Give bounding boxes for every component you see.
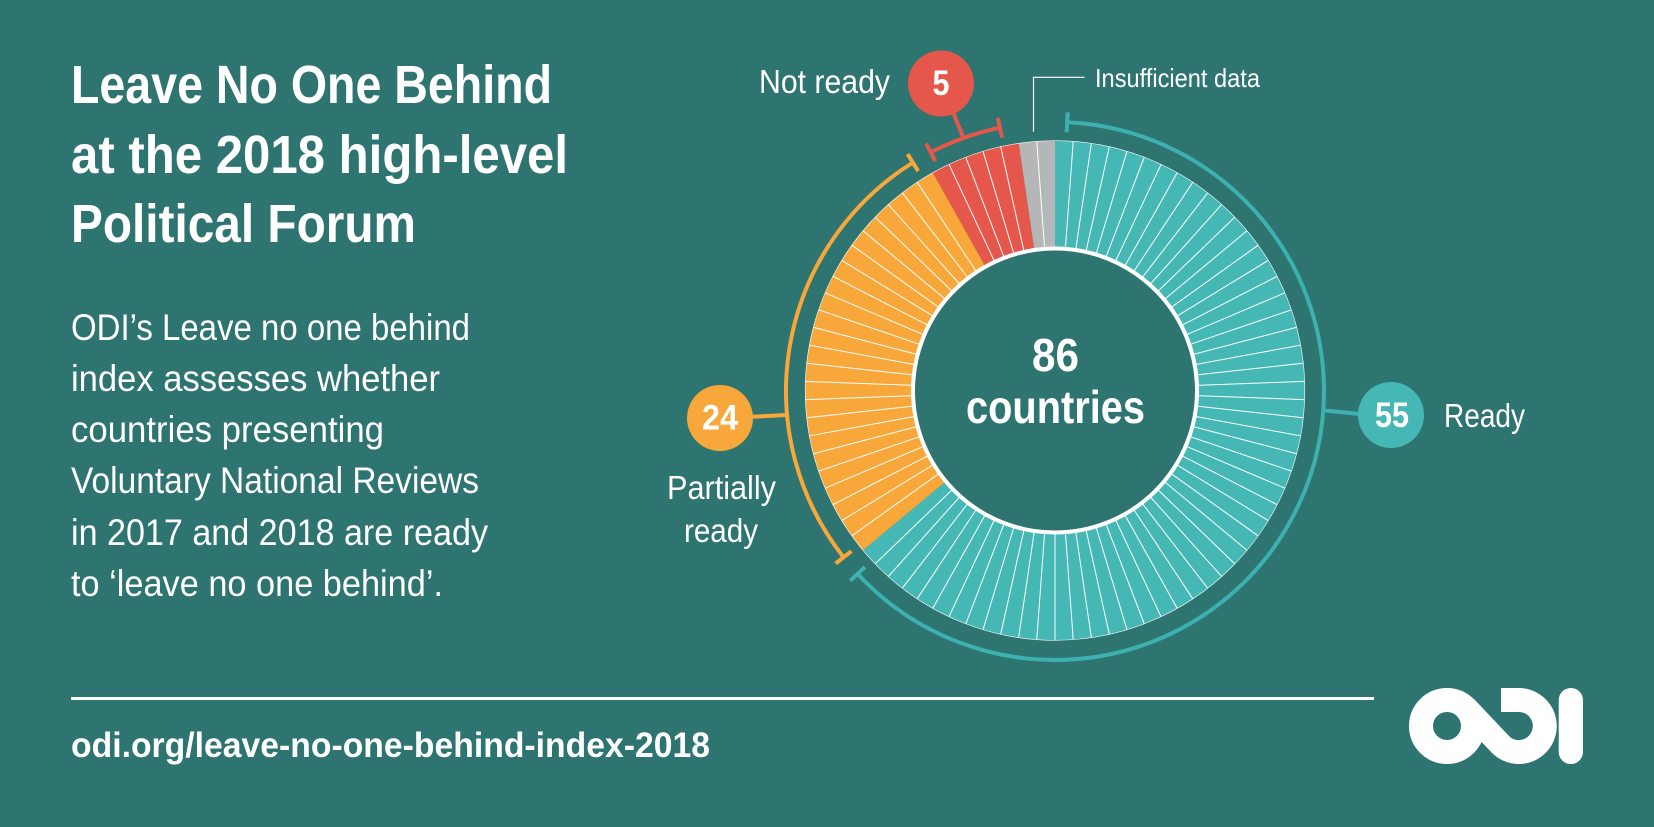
bracket: partially ready [752, 154, 918, 564]
footer link: odi.org/leave-no-one-behind-index-2018 [71, 726, 710, 765]
footer rule [71, 697, 1374, 700]
inner white ring [913, 248, 1197, 532]
title: Leave No One Behind [71, 55, 552, 115]
callout: partially ready: 24 [702, 398, 738, 438]
callout: partially ready: ready [684, 512, 758, 549]
segments: partially ready (24) [859, 194, 1251, 586]
callout: ready [1358, 382, 1525, 448]
callout: not ready [759, 50, 974, 116]
body text: ODI’s Leave no one behind [71, 307, 470, 348]
body text: to ‘leave no one behind’. [71, 563, 443, 604]
body text: Voluntary National Reviews [71, 460, 479, 501]
body text: countries presenting [71, 409, 384, 450]
callout: partially ready: Partially [667, 469, 776, 506]
donut chart: 86 countries [805, 141, 1305, 640]
bracket: not ready [926, 112, 1002, 161]
segments: insufficient data (2) [859, 194, 1251, 586]
callout: not ready: 5 [932, 64, 950, 103]
segment dividers [806, 142, 1304, 640]
logo: ODI [1421, 688, 1583, 764]
centre label: countries [966, 381, 1145, 433]
title: Political Forum [71, 194, 416, 254]
callout: partially ready [667, 385, 776, 549]
title: at the 2018 high-level [71, 125, 568, 185]
title [71, 55, 568, 254]
callout: ready: Ready [1444, 397, 1525, 434]
callout: not ready: Not ready [759, 63, 890, 100]
callout: insufficient data [1034, 63, 1260, 132]
segments: not ready (5) [859, 194, 1251, 586]
outer edge of ring [805, 141, 1305, 640]
body text [71, 307, 488, 604]
callout: insufficient data: Insufficient data [1095, 63, 1260, 93]
segments: ready (55) [859, 194, 1251, 586]
body text: index assesses whether [71, 358, 440, 399]
centre label [966, 329, 1145, 433]
callout: ready: 55 [1375, 396, 1409, 435]
body text: in 2017 and 2018 are ready [71, 512, 488, 553]
centre label: 86 [1032, 329, 1079, 381]
bracket: ready [850, 112, 1360, 660]
